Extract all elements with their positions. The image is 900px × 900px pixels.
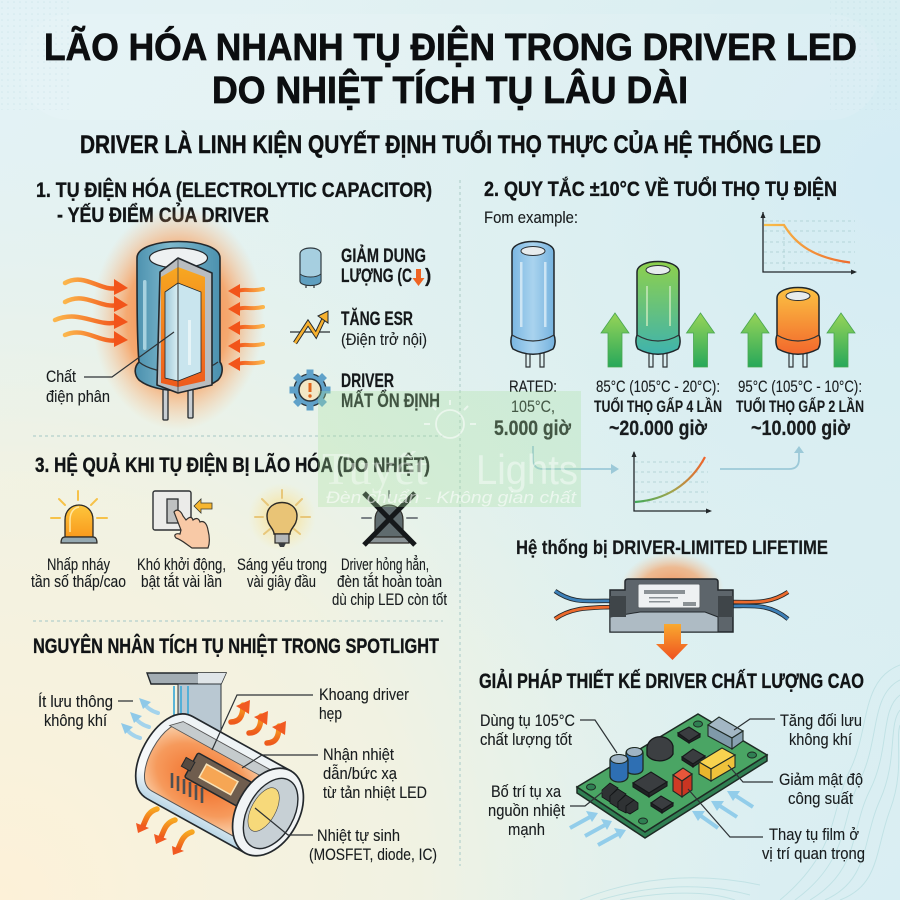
95C value xyxy=(736,377,864,440)
panel: driver limited lifetime xyxy=(479,538,865,863)
caption: dim: vài giây đầu xyxy=(247,572,316,591)
text: higher ESR: (Điện trở nội) xyxy=(341,330,427,349)
heading: Hệ thống bị DRIVER-LIMITED LIFETIME xyxy=(516,538,828,559)
icon: flashing beacon xyxy=(51,491,107,543)
label: 105C capacitors: Dùng tụ 105°C xyxy=(480,711,575,730)
green up arrows xyxy=(601,313,855,367)
label: received heat: dẫn/bức xạ xyxy=(323,764,397,783)
label: electrolyte xyxy=(46,367,110,406)
text: reduced capacity: ) xyxy=(425,266,431,287)
blue-grey relay xyxy=(708,717,743,749)
label: placement: nguồn nhiệt xyxy=(488,801,565,820)
label: electrolyte: Chất xyxy=(46,367,76,386)
heading 1 xyxy=(36,178,432,227)
inductor xyxy=(647,737,673,761)
heat arrows down xyxy=(136,809,192,855)
text: reduced capacity: LƯỢNG (C xyxy=(341,266,412,287)
air arrows bottom left xyxy=(570,811,626,845)
label: electrolyte: điện phân xyxy=(46,387,110,406)
label: convection: Tăng đối lưu xyxy=(780,711,862,730)
heat sink fins xyxy=(172,773,202,803)
label: poor airflow: Ít lưu thông xyxy=(38,692,113,711)
caption: dead driver: Driver hỏng hẳn, xyxy=(341,555,429,574)
air arrows xyxy=(121,698,158,738)
label: poor airflow: không khí xyxy=(44,711,107,730)
yellow component xyxy=(699,748,735,781)
caption: dim xyxy=(237,555,327,591)
caption: dead driver: dù chip LED còn tốt xyxy=(332,590,447,609)
label: power density xyxy=(779,770,863,808)
85C value: ~20.000 giờ xyxy=(609,416,708,440)
arrow: down to solution xyxy=(656,624,688,660)
text: higher ESR xyxy=(341,308,427,349)
85C value: 85°C (105°C - 20°C): xyxy=(596,377,720,396)
watermark: Tuyết xyxy=(322,443,428,494)
caption: dead driver xyxy=(332,555,447,609)
95C value: 95°C (105°C - 10°C): xyxy=(738,377,862,396)
icon: rising ESR xyxy=(290,311,330,343)
panel: spotlight heat causes xyxy=(33,634,439,868)
watermark: Lights xyxy=(476,446,578,493)
watermark: Đèn chuẩn - Không gian chất xyxy=(326,489,578,507)
label: received heat xyxy=(323,745,427,802)
label: received heat: từ tản nhiệt LED xyxy=(323,783,427,802)
caption: hard start: bật tắt vài lần xyxy=(141,572,222,591)
rated value: RATED: xyxy=(509,377,557,396)
panel: consequences xyxy=(31,453,447,609)
chart: decay curve xyxy=(760,212,857,274)
PCB illustration xyxy=(577,714,767,838)
label: self heating: Nhiệt tự sinh xyxy=(317,826,400,845)
panel: electrolytic capacitor xyxy=(36,178,440,430)
label: placement xyxy=(488,782,565,839)
rated value xyxy=(494,377,572,440)
95C value: ~10.000 giờ xyxy=(751,416,851,440)
text: reduced capacity: GIẢM DUNG xyxy=(341,245,426,267)
rated value: 5.000 giờ xyxy=(494,416,572,440)
label: narrow cavity: hẹp xyxy=(319,704,342,723)
caption: hard start: Khó khởi động, xyxy=(137,555,226,574)
arrow: flow to chart xyxy=(533,446,619,474)
label: self heating xyxy=(309,826,437,864)
arrow: flow to 10000 hours xyxy=(720,446,804,469)
label: convection: không khí xyxy=(789,730,852,749)
leader lines xyxy=(570,719,775,837)
panel: capacitor rule xyxy=(484,177,864,514)
label: power density: Giảm mật độ xyxy=(779,770,863,789)
heading 2: 2. QUY TẮC ±10°C VỀ TUỔI THỌ TỤ ĐIỆN xyxy=(484,177,837,201)
driver illustration xyxy=(555,552,788,632)
text: higher ESR: TĂNG ESR xyxy=(341,308,413,330)
85C value: TUỔI THỌ GẤP 4 LẦN xyxy=(594,397,722,416)
capacitor: blue rated xyxy=(511,242,555,367)
caption: flicker: Nhấp nháy xyxy=(47,555,110,574)
chart: growth curve xyxy=(632,451,712,514)
label: 105C capacitors: chất lượng tốt xyxy=(480,730,572,749)
red component xyxy=(673,768,692,797)
air arrows bottom right xyxy=(692,791,753,828)
leader lines xyxy=(118,695,318,835)
icon: gear warning xyxy=(290,370,330,410)
label: placement: Bố trí tụ xa xyxy=(491,782,561,801)
heading 3: 3. HỆ QUẢ KHI TỤ ĐIỆN BỊ LÃO HÓA (DO NHIỆT) xyxy=(35,453,430,477)
label: self heating: (MOSFET, diode, IC) xyxy=(309,845,437,864)
text: reduced capacity xyxy=(341,245,431,287)
85C value xyxy=(594,377,722,440)
capacitors on PCB xyxy=(610,748,643,782)
title xyxy=(44,25,857,112)
capacitor cutaway illustration xyxy=(84,206,264,430)
watermark xyxy=(318,391,581,507)
icon: small capacitor xyxy=(300,248,321,288)
heat sink block xyxy=(602,783,638,814)
label: film capacitor xyxy=(762,825,865,863)
icon: dead beacon crossed out xyxy=(362,491,417,545)
text: unstable driver: DRIVER xyxy=(341,371,394,392)
label: poor airflow xyxy=(38,692,113,730)
heading: NGUYÊN NHÂN TÍCH TỤ NHIỆT TRONG SPOTLIGHT xyxy=(33,634,439,658)
title: LÃO HÓA NHANH TỤ ĐIỆN TRONG DRIVER LED xyxy=(44,25,857,69)
capacitor: green xyxy=(636,262,680,367)
label: narrow cavity xyxy=(319,685,409,723)
heat arrows up xyxy=(231,700,286,743)
spotlight illustration xyxy=(122,673,318,868)
label: narrow cavity: Khoang driver xyxy=(319,685,409,704)
label: 105C capacitors xyxy=(480,711,575,749)
text: unstable driver xyxy=(341,371,440,412)
heat arrows left xyxy=(55,279,128,347)
icon: switch with hand xyxy=(153,491,212,548)
caption: flicker: tần số thấp/cao xyxy=(31,572,126,591)
label: film capacitor: vị trí quan trọng xyxy=(762,844,865,863)
label: film capacitor: Thay tụ film ở xyxy=(769,825,859,844)
rated value: 105°C, xyxy=(511,397,555,416)
heading 1: - YẾU ĐIỂM CỦA DRIVER xyxy=(57,203,269,227)
heat arrows right xyxy=(228,284,263,371)
label: received heat: Nhận nhiệt xyxy=(323,745,394,764)
label: placement: mạnh xyxy=(508,820,545,839)
caption: dead driver: đèn tắt hoàn toàn xyxy=(337,572,442,591)
icon: dim bulb xyxy=(248,483,316,551)
heading 1: 1. TỤ ĐIỆN HÓA (ELECTROLYTIC CAPACITOR) xyxy=(36,178,432,202)
text: unstable driver: MẤT ỔN ĐỊNH xyxy=(341,390,440,412)
capacitor: orange xyxy=(776,288,820,367)
caption: flicker xyxy=(31,555,126,591)
caption: hard start xyxy=(137,555,226,591)
title: DO NHIỆT TÍCH TỤ LÂU DÀI xyxy=(212,68,688,112)
label: power density: công suất xyxy=(788,789,853,808)
chips xyxy=(633,727,705,813)
label: convection xyxy=(780,711,862,749)
example label: Fom example: xyxy=(484,208,578,227)
caption: dim: Sáng yếu trong xyxy=(237,555,327,574)
